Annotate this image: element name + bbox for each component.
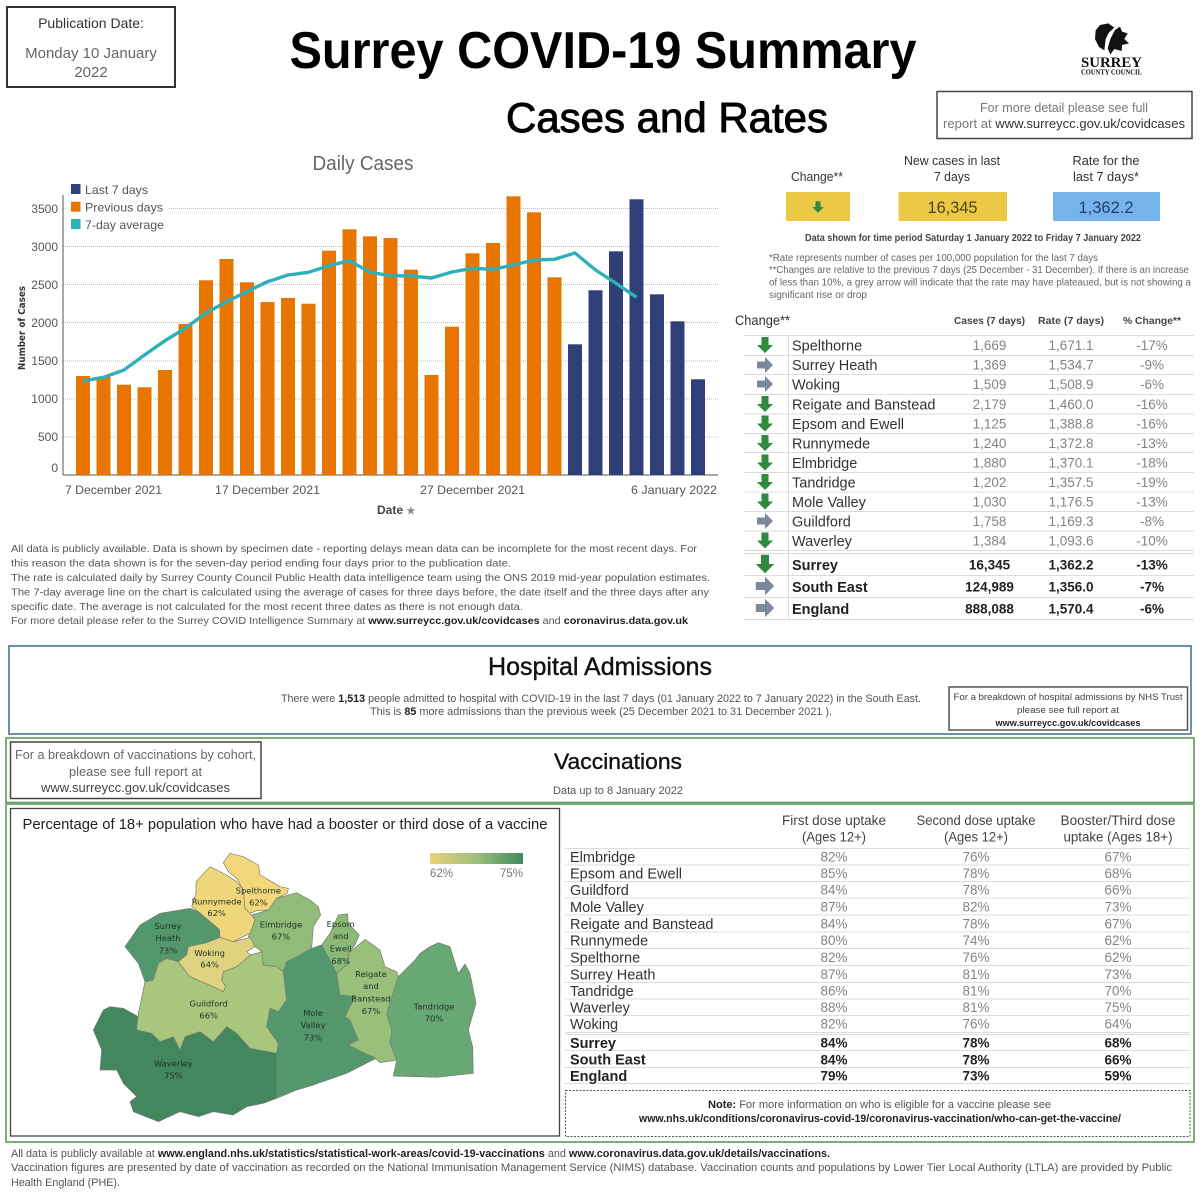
table header: (Ages 12+) xyxy=(944,830,1008,844)
row: Surrey Heath xyxy=(570,967,1132,984)
y axis ticks: 1500 xyxy=(31,354,58,368)
map heading: Percentage of 18+ population who have had a booster or third dose of a vaccine xyxy=(22,817,548,833)
row: England: England xyxy=(570,1069,627,1085)
row: Waverley: 1,093.6 xyxy=(1048,534,1094,548)
KPI: new cases xyxy=(898,154,1007,221)
district: Elmbridge xyxy=(248,893,321,972)
table header: Cases (7 days) xyxy=(954,315,1025,327)
row: Guildford: -8% xyxy=(1140,514,1164,529)
row: Woking: 1,508.9 xyxy=(1048,377,1094,392)
chart legend xyxy=(66,182,168,232)
row: South East: 78% xyxy=(962,1052,990,1068)
chart legend: Last 7 days xyxy=(85,183,148,197)
hospital text: There were 1,513 people admitted to hospital with COVID-19 in the last 7 days (01 January 2022 to 7 January 2022) in the South East. xyxy=(281,693,921,705)
row: Reigate and Banstead: 1,460.0 xyxy=(1048,397,1094,412)
row: Elmbridge: Elmbridge xyxy=(570,850,635,866)
x axis title: Date ★ xyxy=(377,503,415,517)
table header: Rate (7 days) xyxy=(1038,315,1104,327)
row: Reigate and Banstead xyxy=(570,916,1132,933)
row: England: 73% xyxy=(962,1068,990,1084)
hospital text: This is 85 more admissions than the previous week (25 December 2021 to 31 December 2021 ). xyxy=(370,706,832,718)
district: Waverley: Waverley xyxy=(154,1059,193,1069)
row: Surrey: 68% xyxy=(1104,1036,1132,1050)
district: Epsom and Ewell: Ewell xyxy=(330,944,352,954)
vaccination data notes: Health England (PHE). xyxy=(11,1177,120,1189)
row: Reigate and Banstead: -16% xyxy=(1136,397,1168,412)
bar chart: daily cases xyxy=(17,182,718,517)
row: Epsom and Ewell: 68% xyxy=(1104,866,1132,881)
row: Tandridge xyxy=(757,474,1168,492)
row: Surrey Heath: Surrey Heath xyxy=(570,968,655,984)
x axis labels: 7 December 2021 xyxy=(65,483,162,497)
row: Spelthorne: 62% xyxy=(1104,950,1132,965)
row: Guildford: 1,758 xyxy=(973,514,1006,529)
district: Reigate and Banstead: Banstead xyxy=(351,994,391,1004)
row: Reigate and Banstead: Reigate and Banstead xyxy=(570,917,714,933)
logo: Surrey County Council: SURREY xyxy=(1081,55,1142,71)
row: Mole Valley: 1,176.5 xyxy=(1048,494,1094,510)
publication date box: Monday 10 January xyxy=(25,45,157,62)
table header xyxy=(782,813,1176,844)
row: Tandridge: 70% xyxy=(1104,984,1132,998)
row: Runnymede: 74% xyxy=(962,933,990,948)
district: Mole Valley: Valley xyxy=(301,1020,325,1030)
row: Woking: 82% xyxy=(820,1016,848,1032)
row: Waverley: Waverley xyxy=(570,1000,631,1016)
row: Elmbridge xyxy=(570,850,1132,866)
choropleth map of Surrey districts xyxy=(93,853,476,1122)
row: Woking: Woking xyxy=(792,378,840,394)
row: Surrey Heath: 73% xyxy=(1104,967,1132,982)
district: Guildford: 66% xyxy=(199,1011,218,1021)
row: Spelthorne: 76% xyxy=(962,950,990,965)
table header: (Ages 12+) xyxy=(802,830,866,844)
chart notes text: For more detail please refer to the Surrey COVID Intelligence Summary at www.surreycc.gov.uk/covidcases and coronavirus.data.gov.uk xyxy=(11,615,688,627)
table header: % Change** xyxy=(1123,315,1182,327)
row: Spelthorne: Spelthorne xyxy=(792,338,862,354)
row: Mole Valley: Mole Valley xyxy=(570,900,645,916)
row: Reigate and Banstead: 67% xyxy=(1104,916,1132,932)
row: Epsom and Ewell: 78% xyxy=(962,866,990,881)
y axis ticks: 3000 xyxy=(31,240,58,254)
row: Runnymede: Runnymede xyxy=(792,436,870,452)
row: Guildford: 66% xyxy=(1104,882,1132,898)
row: England: 888,088 xyxy=(965,602,1014,616)
row: Mole Valley: 87% xyxy=(820,900,848,914)
panel: hospital admissions xyxy=(9,646,1191,734)
publication date box xyxy=(7,7,175,87)
row: Guildford: 84% xyxy=(820,882,848,898)
row: Epsom and Ewell xyxy=(757,416,1168,433)
district: Elmbridge: 67% xyxy=(272,931,290,941)
KPI: rate: last 7 days* xyxy=(1073,170,1139,184)
row: Surrey: Surrey xyxy=(792,558,838,574)
row: Woking: 64% xyxy=(1104,1016,1132,1032)
row: Tandridge: Tandridge xyxy=(792,476,856,492)
row: England: 1,570.4 xyxy=(1048,602,1094,616)
row: Surrey Heath: -9% xyxy=(1140,358,1164,372)
NHS trust breakdown box: For a breakdown of hospital admissions by NHS Trust xyxy=(954,692,1183,703)
KPI: rate: 1,362.2 xyxy=(1078,198,1134,217)
y axis title: Number of Cases xyxy=(17,286,28,370)
district: Woking xyxy=(178,937,255,992)
row: Surrey: 1,362.2 xyxy=(1048,558,1094,572)
KPI: new cases: 16,345 xyxy=(928,198,978,217)
row: Surrey: 84% xyxy=(820,1036,848,1050)
row: Runnymede: 1,372.8 xyxy=(1048,436,1094,451)
district: Mole Valley: Mole xyxy=(303,1008,323,1018)
publication date box: Publication Date: xyxy=(38,15,144,31)
row: Tandridge: 1,202 xyxy=(973,475,1006,490)
row: Reigate and Banstead: Reigate and Banstead xyxy=(792,398,936,414)
heading: hospital admissions: Hospital Admissions xyxy=(488,653,712,681)
row: Surrey: 78% xyxy=(962,1036,990,1050)
row: Woking: -6% xyxy=(1140,377,1164,392)
row: South East: 1,356.0 xyxy=(1048,580,1094,594)
row: Mole Valley: 1,030 xyxy=(973,494,1006,510)
district: Waverley: 75% xyxy=(164,1071,183,1081)
district: Elmbridge: Elmbridge xyxy=(260,920,302,930)
row: Spelthorne xyxy=(757,337,1168,354)
row: Waverley: Waverley xyxy=(792,534,853,550)
y axis ticks xyxy=(31,202,58,475)
row: Surrey: Surrey xyxy=(570,1036,616,1052)
table: vaccination uptake xyxy=(565,813,1190,1085)
row: Tandridge: 86% xyxy=(820,984,848,998)
row: Runnymede: 1,240 xyxy=(973,436,1006,451)
NHS trust breakdown box xyxy=(949,687,1188,730)
district: Woking: 64% xyxy=(200,960,219,970)
row: Woking: 1,509 xyxy=(973,377,1006,392)
row: Elmbridge: Elmbridge xyxy=(792,456,857,472)
row: South East xyxy=(756,577,1164,596)
row: Reigate and Banstead xyxy=(757,396,1168,414)
row: England: 79% xyxy=(820,1068,848,1084)
district: Spelthorne xyxy=(223,853,288,913)
chart title: Daily Cases: Daily Cases xyxy=(312,153,414,175)
row: Waverley: 75% xyxy=(1104,1000,1132,1015)
row: Spelthorne: 1,669 xyxy=(973,338,1006,353)
row: Spelthorne xyxy=(570,950,1132,966)
row: Reigate and Banstead: 84% xyxy=(820,916,848,932)
row: Surrey Heath: 1,369 xyxy=(973,358,1006,372)
district: Spelthorne: Spelthorne xyxy=(236,886,281,896)
district: Runnymede xyxy=(192,867,255,942)
KPI: new cases: 7 days xyxy=(934,170,970,184)
district: Waverley xyxy=(93,1007,277,1122)
rate footnotes: significant rise or drop xyxy=(769,290,867,301)
KPI: new cases: New cases in last xyxy=(904,154,1001,168)
row: Woking xyxy=(570,1016,1132,1033)
table header: Second dose uptake xyxy=(916,813,1036,828)
row: England xyxy=(570,1068,1132,1085)
vaccine eligibility note xyxy=(566,1090,1190,1136)
more detail box: For more detail please see full xyxy=(980,100,1148,115)
logo: Surrey County Council: COUNTY COUNCIL xyxy=(1081,68,1142,76)
district: Epsom and Ewell: Epsom xyxy=(327,919,355,929)
row: Epsom and Ewell: 1,125 xyxy=(973,416,1006,432)
y axis ticks: 2500 xyxy=(31,278,58,292)
orange bars: previous days xyxy=(76,196,562,475)
chart notes text: All data is publicly available. Data is shown by specimen date - reporting delays mean data can be incomplete for the most recent days. For xyxy=(11,543,698,555)
cohort breakdown box: For a breakdown of vaccinations by cohort, xyxy=(15,747,256,762)
district: Epsom and Ewell: 68% xyxy=(331,956,350,966)
row: Waverley: -10% xyxy=(1136,534,1168,548)
chart notes text: The 7-day average line on the chart is calculated using the average of cases for three days before, the date itself and the three days after any xyxy=(11,586,710,598)
district: Spelthorne: 62% xyxy=(249,898,268,908)
district: Reigate and Banstead: Reigate xyxy=(355,969,387,979)
cohort breakdown box xyxy=(10,742,261,798)
rate footnotes xyxy=(769,253,1191,301)
district: Tandridge xyxy=(387,943,476,1077)
chart notes text: specific date. The average is not calculated for the most recent three dates as there is not enough data. xyxy=(11,601,523,613)
data period text: Data shown for time period Saturday 1 January 2022 to Friday 7 January 2022 xyxy=(805,233,1141,244)
district: Epsom and Ewell: and xyxy=(333,931,348,941)
row: South East xyxy=(570,1052,1132,1068)
district: Surrey Heath: 73% xyxy=(159,946,177,956)
row: Elmbridge: -18% xyxy=(1136,456,1168,470)
district: Mole Valley xyxy=(267,945,376,1098)
row: Mole Valley: Mole Valley xyxy=(792,495,867,511)
row: Runnymede xyxy=(757,435,1168,452)
table: cases by district xyxy=(735,313,1194,620)
data date: Data up to 8 January 2022 xyxy=(553,785,683,797)
district: Runnymede: Runnymede xyxy=(192,896,242,906)
chart notes text: The rate is calculated daily by Surrey County Council Public Health data intelligence team using the ONS 2019 mid-year population estimates. xyxy=(11,572,710,584)
row: Mole Valley: -13% xyxy=(1136,494,1168,510)
row: Waverley: 88% xyxy=(820,1000,848,1015)
KPI: rate: Rate for the xyxy=(1072,154,1140,168)
row: Surrey Heath: 1,534.7 xyxy=(1048,358,1094,372)
row: South East: -7% xyxy=(1140,580,1164,594)
district: Tandridge: 70% xyxy=(425,1013,443,1023)
row: Waverley: 81% xyxy=(962,1000,990,1015)
row: Elmbridge: 76% xyxy=(962,850,990,864)
row: Epsom and Ewell xyxy=(570,866,1132,882)
7-day average line xyxy=(83,253,636,381)
NHS trust breakdown box: www.surreycc.gov.uk/covidcases xyxy=(995,718,1140,729)
row: Guildford xyxy=(757,513,1164,530)
y axis ticks: 0 xyxy=(51,461,58,475)
x axis labels: 27 December 2021 xyxy=(420,483,525,497)
cohort breakdown box: please see full report at xyxy=(69,764,202,779)
row: Spelthorne: -17% xyxy=(1136,338,1168,353)
row: Epsom and Ewell: -16% xyxy=(1136,416,1168,432)
row: Epsom and Ewell: 85% xyxy=(820,866,848,881)
vaccination data notes: All data is publicly available at www.england.nhs.uk/statistics/statistical-work-areas/covid-19-vaccinations and www.coronavirus.data.gov.uk/details/vaccinations. xyxy=(11,1148,830,1160)
row: Waverley xyxy=(570,1000,1132,1016)
y axis ticks: 2000 xyxy=(31,316,58,330)
row: Guildford: Guildford xyxy=(570,883,629,899)
y axis ticks: 500 xyxy=(38,430,58,444)
district: Reigate and Banstead: 67% xyxy=(362,1006,380,1016)
row: Surrey xyxy=(570,1036,1132,1052)
row: Surrey xyxy=(756,555,1168,574)
row: England xyxy=(756,599,1164,618)
row: Guildford: Guildford xyxy=(792,514,851,530)
chart legend: 7-day average xyxy=(85,218,164,232)
table header: uptake (Ages 18+) xyxy=(1064,830,1172,844)
row: South East: 66% xyxy=(1104,1052,1132,1068)
map legend: 62% xyxy=(430,868,453,880)
row: Guildford: 78% xyxy=(962,882,990,898)
row: Elmbridge: 1,370.1 xyxy=(1048,456,1094,470)
panel: booster map xyxy=(10,808,560,1136)
chart notes text xyxy=(11,543,710,627)
row: Surrey: 16,345 xyxy=(969,558,1011,572)
row: Reigate and Banstead: 2,179 xyxy=(973,397,1006,412)
x axis labels: 6 January 2022 xyxy=(631,483,717,497)
hospital text xyxy=(281,693,921,718)
district: Woking: Woking xyxy=(194,948,225,958)
district: Runnymede: 62% xyxy=(207,908,226,918)
district: Guildford xyxy=(137,952,287,1053)
publication date box: 2022 xyxy=(74,64,108,81)
row: Epsom and Ewell: Epsom and Ewell xyxy=(570,866,682,882)
row: Elmbridge: 67% xyxy=(1104,850,1132,864)
chart notes text: this reason the data shown is for the seven-day period ending four days prior to the publication date. xyxy=(11,558,511,570)
row: Tandridge: 1,357.5 xyxy=(1048,475,1094,490)
row: Surrey Heath: 87% xyxy=(820,967,848,982)
table header: First dose uptake xyxy=(782,813,886,828)
NHS trust breakdown box: please see full report at xyxy=(1017,705,1119,716)
row: Reigate and Banstead: 78% xyxy=(962,916,990,932)
row: South East: South East xyxy=(570,1052,646,1068)
vaccine eligibility note: www.nhs.uk/conditions/coronavirus-covid-19/coronavirus-vaccination/who-can-get-the-vaccine/ xyxy=(638,1113,1121,1125)
panel: vaccinations body xyxy=(6,804,1194,1142)
more detail box: report at www.surreycc.gov.uk/covidcases xyxy=(943,116,1186,131)
row: Tandridge: Tandridge xyxy=(570,984,634,1000)
subtitle: Cases and Rates xyxy=(506,94,828,141)
row: Runnymede: -13% xyxy=(1136,436,1168,451)
row: Runnymede: 62% xyxy=(1104,933,1132,948)
row: South East: 124,989 xyxy=(965,580,1014,594)
logo: Surrey County Council xyxy=(1081,23,1142,76)
row: Spelthorne: 1,671.1 xyxy=(1048,338,1094,353)
vaccine eligibility note: Note: For more information on who is eligible for a vaccine please see xyxy=(708,1099,1051,1111)
row: Mole Valley xyxy=(757,494,1168,511)
row: England: -6% xyxy=(1140,602,1164,616)
row: Runnymede: Runnymede xyxy=(570,934,648,950)
row: Mole Valley xyxy=(570,900,1132,916)
row: Woking: Woking xyxy=(570,1017,618,1033)
district: Tandridge: Tandridge xyxy=(413,1001,454,1011)
district: Surrey Heath: Surrey xyxy=(154,921,182,931)
row: Tandridge: -19% xyxy=(1136,475,1168,490)
row: Runnymede xyxy=(570,933,1132,950)
more detail box xyxy=(937,92,1192,138)
row: Spelthorne: 82% xyxy=(820,950,848,965)
title: Surrey COVID-19 Summary xyxy=(290,22,917,80)
chart legend: Previous days xyxy=(85,200,163,214)
x axis labels: 17 December 2021 xyxy=(215,483,320,497)
navy bars: last 7 days xyxy=(568,199,705,475)
row: Woking: 76% xyxy=(962,1016,990,1032)
vaccination data notes xyxy=(11,1148,1173,1189)
row: Elmbridge: 1,880 xyxy=(973,456,1006,470)
row: Epsom and Ewell: Epsom and Ewell xyxy=(792,417,904,433)
table header xyxy=(735,313,1182,328)
row: Epsom and Ewell: 1,388.8 xyxy=(1048,416,1094,432)
KPI: rate xyxy=(1053,154,1160,221)
vaccination data notes: Vaccination figures are presented by date of vaccination as recorded on the National Immunisation Management Service (NIMS) database. Vaccination counts and populations by Lower Tier Local Authority (LTLA) are provided by Public xyxy=(11,1162,1173,1174)
row: England: 59% xyxy=(1104,1068,1132,1084)
table header: Change** xyxy=(735,313,791,328)
row: Mole Valley: 82% xyxy=(962,900,990,914)
y axis ticks: 1000 xyxy=(31,392,58,406)
rate footnotes: *Rate represents number of cases per 100,000 population for the last 7 days xyxy=(769,253,1098,264)
x axis labels xyxy=(65,483,717,497)
row: Guildford xyxy=(570,882,1132,899)
row: Surrey Heath xyxy=(757,357,1164,374)
row: Tandridge xyxy=(570,984,1132,1000)
y axis ticks: 3500 xyxy=(31,202,58,216)
map legend xyxy=(430,853,523,880)
panel: vaccinations header xyxy=(6,738,1194,802)
row: Waverley: 1,384 xyxy=(973,534,1007,548)
row: Mole Valley: 73% xyxy=(1104,900,1132,914)
row: Spelthorne: Spelthorne xyxy=(570,950,640,966)
row: Runnymede: 80% xyxy=(820,933,848,948)
row: Woking xyxy=(757,376,1164,394)
cohort breakdown box: www.surreycc.gov.uk/covidcases xyxy=(40,780,230,795)
district: Guildford: Guildford xyxy=(190,999,228,1009)
row: South East: South East xyxy=(792,580,868,596)
row: Surrey: -13% xyxy=(1136,558,1168,572)
row: Surrey Heath: Surrey Heath xyxy=(792,358,877,374)
row: Surrey Heath: 81% xyxy=(962,967,990,982)
district: Surrey Heath: Heath xyxy=(155,933,181,943)
table header: Booster/Third dose xyxy=(1060,813,1176,828)
KPI: change xyxy=(786,170,850,221)
row: South East: 84% xyxy=(820,1052,848,1068)
district: Reigate and Banstead xyxy=(337,939,398,1063)
row: Elmbridge xyxy=(757,454,1168,472)
district: Surrey Heath xyxy=(125,908,219,982)
KPI: change: Change** xyxy=(791,170,843,184)
map legend: 75% xyxy=(500,868,523,880)
row: Tandridge: 81% xyxy=(962,984,990,998)
district: Mole Valley: 73% xyxy=(304,1032,322,1042)
row: Elmbridge: 82% xyxy=(820,850,848,864)
district: Reigate and Banstead: and xyxy=(363,981,379,991)
heading: vaccinations: Vaccinations xyxy=(554,749,682,774)
district: Epsom and Ewell xyxy=(322,914,359,973)
row: Guildford: 1,169.3 xyxy=(1048,514,1094,529)
row: Waverley xyxy=(757,532,1168,550)
row: England: England xyxy=(792,602,849,618)
